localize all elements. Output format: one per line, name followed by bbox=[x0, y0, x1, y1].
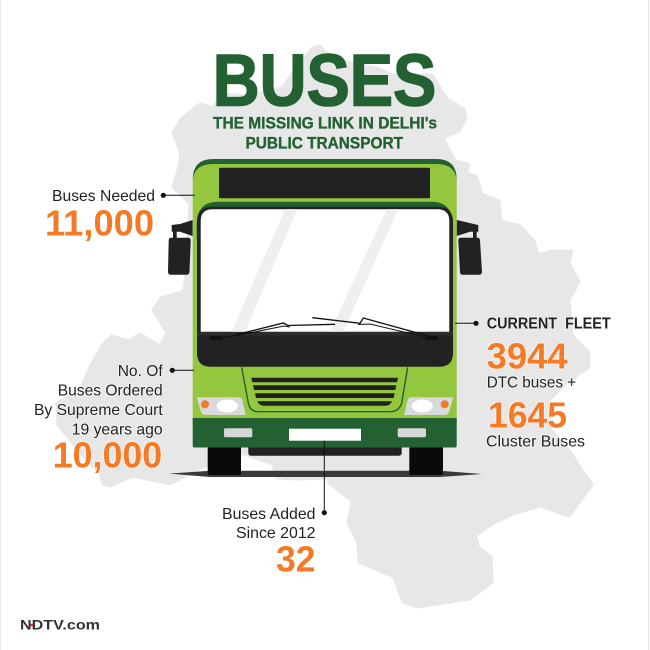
underbody bbox=[248, 445, 402, 456]
left headlight bbox=[197, 397, 246, 415]
grille bbox=[242, 367, 408, 412]
roof cap bbox=[193, 159, 457, 180]
NDTV logo: NDTV.com bbox=[20, 617, 100, 632]
bumper lights bbox=[224, 428, 426, 437]
callout: buses needed: 11,000 bbox=[45, 202, 154, 243]
callout: buses ordered by Supreme Court: 19 years ago bbox=[72, 421, 163, 438]
right headlight bbox=[404, 397, 453, 415]
bus illustration bbox=[168, 159, 482, 477]
dashboard edge bbox=[197, 332, 453, 336]
bumper bbox=[193, 418, 457, 448]
subtitle: PUBLIC TRANSPORT bbox=[246, 134, 404, 153]
callout: buses added since 2012: Since 2012 bbox=[236, 525, 316, 542]
callout: buses ordered by Supreme Court bbox=[34, 363, 194, 475]
callout: buses added since 2012: Buses Added bbox=[222, 506, 316, 523]
callout: buses added since 2012 bbox=[222, 441, 327, 580]
callout: buses needed: Buses Needed bbox=[52, 188, 155, 205]
callout: buses needed bbox=[45, 188, 195, 243]
callout: buses ordered by Supreme Court: No. Of bbox=[118, 363, 163, 380]
windshield bbox=[201, 209, 449, 332]
right mirror bbox=[457, 220, 482, 275]
callout: buses added since 2012: 32 bbox=[276, 539, 316, 580]
bus body bbox=[193, 159, 457, 425]
subtitle bbox=[213, 113, 437, 153]
callout: buses ordered by Supreme Court: Buses Ordered bbox=[58, 382, 163, 400]
wheels bbox=[208, 440, 443, 475]
callout: current fleet: 1645 bbox=[488, 394, 567, 435]
callout: current fleet bbox=[455, 316, 611, 451]
callout: buses ordered by Supreme Court: By Supreme Court bbox=[34, 402, 163, 419]
subtitle: THE MISSING LINK IN DELHI's bbox=[213, 113, 437, 132]
title: BUSES bbox=[213, 38, 436, 121]
window arch bbox=[197, 202, 453, 240]
glare streaks bbox=[232, 209, 398, 332]
callout: buses ordered by Supreme Court: 10,000 bbox=[53, 434, 162, 475]
callout: current fleet: CURRENT FLEET bbox=[487, 316, 611, 333]
map of Delhi silhouette bbox=[57, 46, 592, 607]
callout: current fleet: DTC buses + bbox=[487, 375, 576, 392]
window frame and dashboard bbox=[197, 207, 453, 367]
left mirror bbox=[168, 220, 193, 275]
right wiper bbox=[312, 318, 438, 340]
callout: current fleet: Cluster Buses bbox=[486, 434, 585, 451]
number plate bbox=[289, 429, 361, 441]
destination sign bbox=[219, 168, 430, 198]
callout: current fleet: 3944 bbox=[487, 336, 568, 377]
ground shadow bbox=[169, 471, 482, 477]
left wiper bbox=[210, 323, 335, 340]
